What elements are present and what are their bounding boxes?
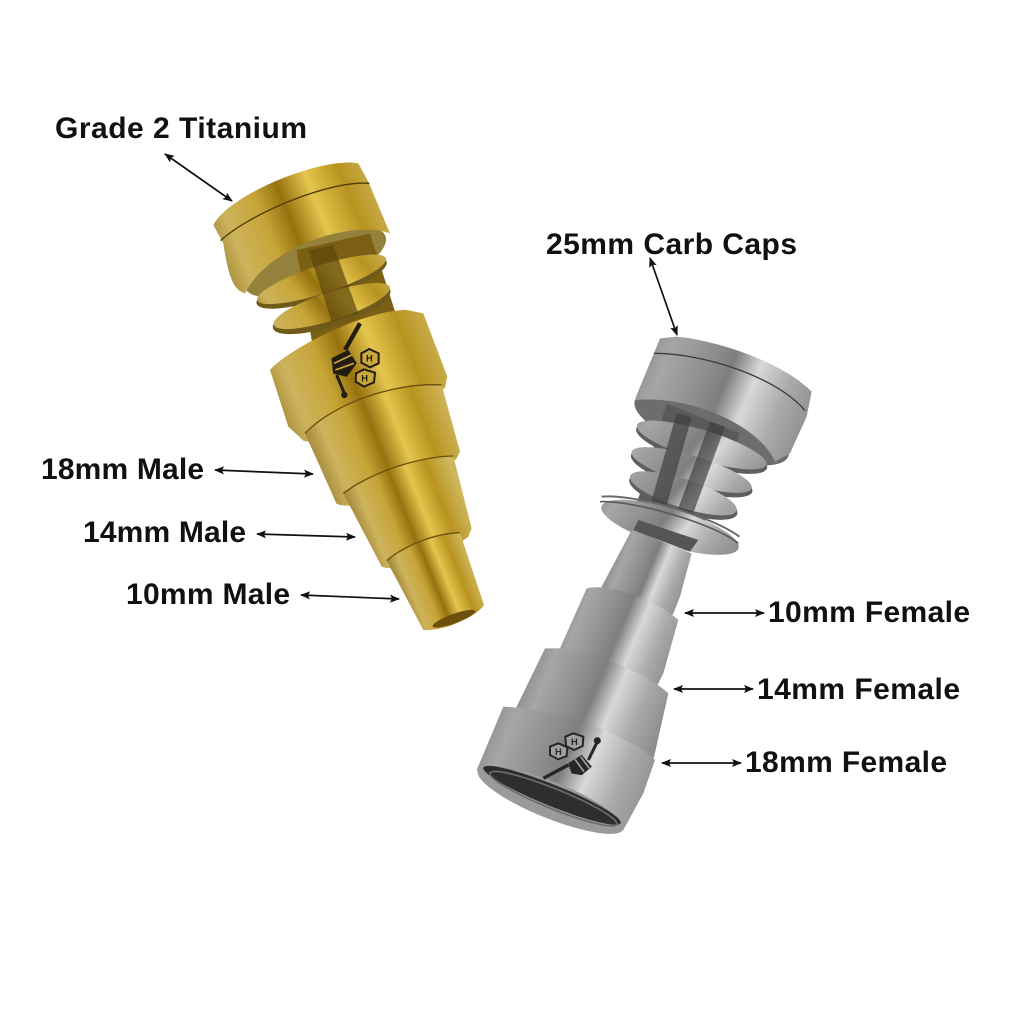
arrow: 14mm Female bbox=[674, 688, 753, 690]
gold cap underside bbox=[235, 211, 395, 312]
gold cap bbox=[213, 163, 390, 293]
icon: honey dipper logo silver bbox=[543, 733, 601, 778]
label: 18mm Female: 18mm Female bbox=[745, 746, 947, 779]
arrow: 10mm Female bbox=[685, 612, 764, 614]
label: 18mm Male: 18mm Male bbox=[41, 453, 204, 486]
arrow: 18mm Male bbox=[215, 470, 313, 474]
gold stage 18mm bbox=[305, 385, 460, 506]
silver titanium nail bbox=[471, 337, 812, 846]
arrow: Grade 2 Titanium bbox=[165, 154, 232, 201]
gold stage 10mm bbox=[387, 533, 484, 630]
icon: honey dipper logo gold bbox=[332, 323, 379, 398]
icon: honey dipper logo gold: H bbox=[361, 374, 368, 384]
silver stage 18mm bbox=[517, 648, 668, 763]
silver base opening bbox=[471, 754, 630, 846]
silver cap underside bbox=[626, 376, 797, 481]
silver neck cone bbox=[602, 530, 692, 624]
gold tip opening bbox=[431, 607, 477, 631]
icon: honey dipper logo silver: H bbox=[571, 737, 578, 747]
silver stage 14mm bbox=[560, 587, 678, 687]
silver cap bbox=[635, 337, 812, 462]
arrow: 10mm Male bbox=[301, 595, 399, 599]
label: 14mm Male: 14mm Male bbox=[83, 516, 246, 549]
silver base collar bbox=[477, 707, 655, 831]
gold collar bbox=[270, 310, 447, 442]
label: 14mm Female: 14mm Female bbox=[757, 673, 960, 706]
gold titanium nail bbox=[213, 163, 484, 631]
icon: honey dipper logo gold: H bbox=[366, 353, 373, 363]
gold neck and fins bbox=[252, 233, 397, 350]
label: 10mm Male: 10mm Male bbox=[126, 578, 290, 611]
icon: honey dipper logo silver: H bbox=[555, 747, 562, 757]
silver neck and fins bbox=[624, 403, 772, 550]
arrow: 18mm Female bbox=[662, 762, 741, 764]
label: 10mm Female: 10mm Female bbox=[768, 596, 970, 629]
label: 25mm Carb Caps: 25mm Carb Caps bbox=[546, 228, 797, 261]
silver threaded flange bbox=[596, 489, 744, 566]
arrow: 14mm Male bbox=[257, 534, 355, 537]
gold stage 14mm bbox=[343, 456, 472, 568]
arrow: 25mm Carb Caps bbox=[650, 258, 677, 335]
label: Grade 2 Titanium: Grade 2 Titanium bbox=[55, 112, 307, 145]
